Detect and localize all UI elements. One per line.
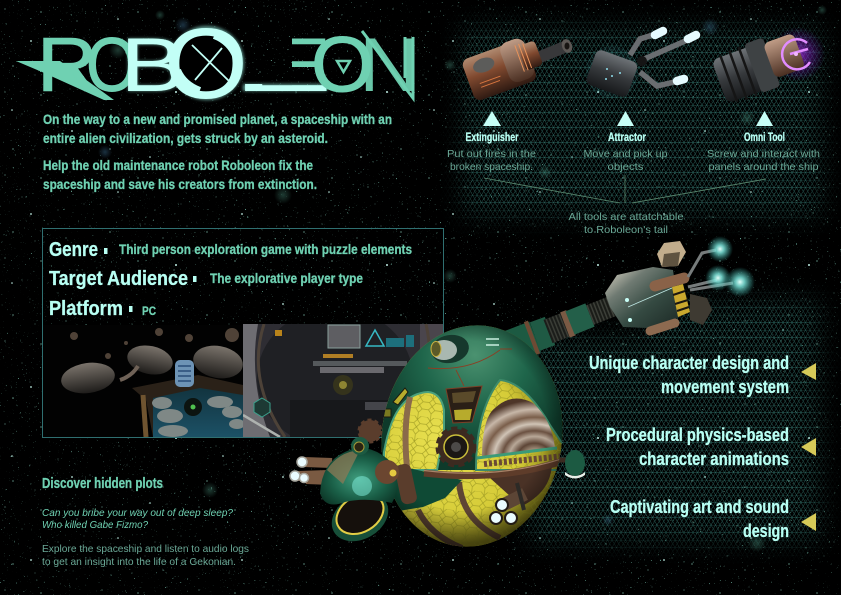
note: attachable tools bbox=[568, 211, 684, 236]
green upper shell bbox=[382, 325, 562, 470]
intro text: entire alien civilization, gets struck by an asteroid. bbox=[43, 130, 328, 146]
feature: character design: movement system bbox=[661, 377, 789, 397]
feature: animations bbox=[606, 425, 789, 469]
icon: omni tool bbox=[710, 27, 825, 106]
label: attractor: Attractor bbox=[608, 132, 646, 144]
plot questions: Can you bribe your way out of deep sleep? bbox=[42, 507, 233, 519]
platform: Platform bbox=[49, 298, 123, 320]
description: extinguisher: broken spaceship. bbox=[450, 161, 533, 173]
dark vent window bbox=[446, 386, 482, 423]
arrow: feature two bbox=[801, 438, 816, 456]
text: discover hidden plots bbox=[42, 476, 249, 568]
icon: attractor bbox=[585, 31, 696, 98]
intro text: spaceship and save his creators from extinction. bbox=[43, 176, 317, 192]
target audience: The explorative player type bbox=[210, 270, 363, 286]
logo: Roboleon bbox=[16, 24, 414, 102]
feature: animations: Procedural physics-based bbox=[606, 425, 789, 445]
logo: Roboleon: L bbox=[230, 22, 332, 107]
feature: art and sound: Captivating art and sound bbox=[610, 497, 789, 517]
tail arm bbox=[505, 304, 618, 348]
screenshot: ship exterior bbox=[43, 325, 245, 437]
panel: game facts bbox=[42, 228, 444, 448]
logo: Roboleon: O bbox=[164, 9, 248, 120]
connector lines bbox=[484, 175, 766, 203]
target audience: Target Audience bbox=[49, 268, 188, 290]
text: discover hidden plots: Discover hidden plots bbox=[42, 476, 163, 492]
tail tool head bbox=[605, 236, 755, 331]
feature: art and sound bbox=[610, 497, 789, 541]
label: omni tool: Omni Tool bbox=[744, 132, 785, 144]
top sensor eye bbox=[429, 332, 499, 366]
label: extinguisher: Extinguisher bbox=[466, 132, 519, 144]
description: extinguisher: Put out fires in the bbox=[447, 148, 536, 160]
logo: Roboleon: N bbox=[359, 23, 419, 107]
arrow: feature one bbox=[801, 363, 816, 380]
left yellow panel bbox=[384, 392, 444, 470]
logo: Roboleon: O bbox=[86, 23, 138, 108]
icon: extinguisher bbox=[460, 33, 574, 102]
logo: dark disc behind big O bbox=[175, 31, 239, 95]
logo: tail of the R bbox=[16, 61, 114, 100]
logo: Roboleon: E bbox=[277, 22, 330, 108]
description: extinguisher bbox=[447, 148, 536, 173]
side gear bbox=[438, 429, 474, 465]
edge shading bbox=[394, 326, 562, 546]
plot description: to get an insight into the life of a Gekonian. bbox=[42, 556, 236, 568]
screenshot: ship interior bbox=[243, 324, 443, 437]
note: attachable tools: All tools are attatchable bbox=[568, 211, 684, 223]
feature: character design: Unique character design and bbox=[589, 353, 789, 373]
arrow: feature three bbox=[801, 513, 816, 531]
arrow: omni tool bbox=[756, 111, 773, 126]
genre: Third person exploration game with puzzle elements bbox=[119, 241, 412, 257]
arrow: attractor bbox=[617, 111, 634, 126]
logo: crossed lines in the big O bbox=[178, 36, 236, 90]
description: attractor bbox=[584, 148, 668, 173]
note: attachable tools: to Roboleon's tail bbox=[584, 224, 668, 236]
panel: tools bbox=[447, 27, 825, 236]
feature: animations: character animations bbox=[639, 449, 789, 469]
brass ribbed dome bbox=[482, 399, 555, 458]
intro text: On the way to a new and promised planet, a spaceship with an bbox=[43, 111, 392, 127]
description: omni tool bbox=[707, 148, 820, 173]
arrow: extinguisher bbox=[483, 111, 501, 126]
genre: Genre bbox=[49, 239, 98, 261]
intro text: Help the old maintenance robot Roboleon fix the bbox=[43, 157, 313, 173]
shell seams bbox=[428, 349, 512, 386]
feature: character design bbox=[589, 353, 789, 397]
description: attractor: Move and pick up bbox=[584, 148, 668, 160]
description: omni tool: panels around the ship bbox=[708, 161, 819, 173]
plot description: Explore the spaceship and listen to audio logs bbox=[42, 543, 249, 555]
platform: PC bbox=[142, 304, 156, 318]
genre bbox=[49, 239, 412, 261]
brown strap bbox=[406, 397, 410, 468]
head with mouth and eyes bbox=[290, 420, 418, 551]
rear knob bbox=[558, 450, 585, 478]
logo: Roboleon: B bbox=[120, 22, 186, 107]
main bronze belt bbox=[424, 460, 566, 476]
green rim and toothed ring bbox=[477, 448, 557, 458]
logo: Roboleon: B bbox=[120, 22, 186, 107]
target audience bbox=[49, 268, 363, 290]
feature: art and sound: design bbox=[743, 521, 789, 541]
description: attractor: objects bbox=[608, 161, 644, 173]
logo: Roboleon: R bbox=[37, 23, 97, 107]
triangle mesh grid backdrop bbox=[448, 11, 837, 556]
panel: key features bbox=[589, 353, 816, 541]
plot description bbox=[42, 543, 249, 568]
description: omni tool: Screw and interact with bbox=[707, 148, 820, 160]
lower dark wedge bbox=[490, 468, 552, 504]
plot questions: Who killed Gabe Fizmo? bbox=[42, 519, 148, 531]
plot questions bbox=[42, 507, 233, 531]
logo: Roboleon: O bbox=[311, 20, 374, 108]
right yellow band bbox=[477, 381, 562, 470]
green neck wedge bbox=[392, 465, 462, 512]
spherical body bbox=[382, 325, 562, 547]
character: Roboleon robot bbox=[290, 236, 755, 555]
lower brown stripes bbox=[418, 482, 500, 548]
lower triple lights bbox=[490, 483, 525, 524]
intro text bbox=[43, 111, 392, 192]
